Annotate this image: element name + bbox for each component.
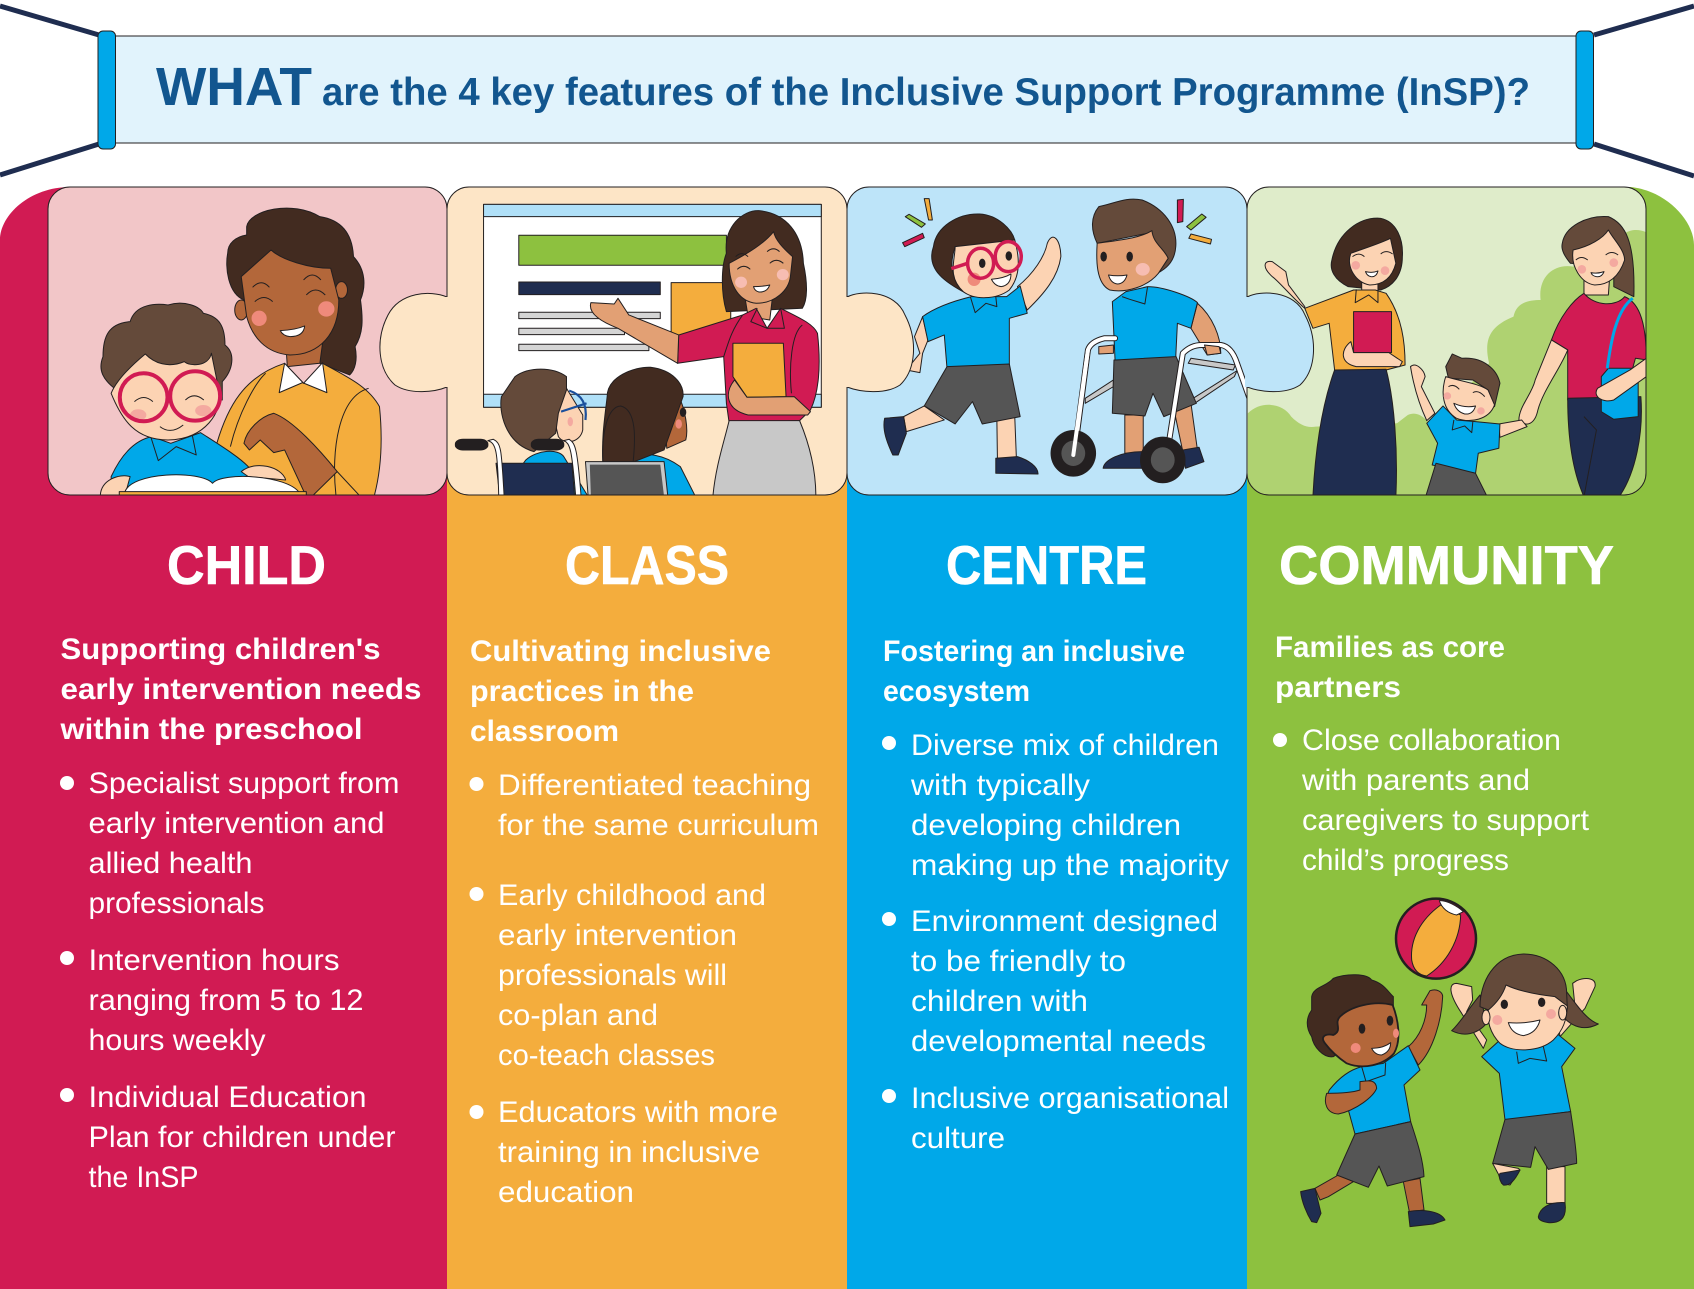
classroom screen [484, 204, 821, 407]
bullets: class: education [498, 1176, 634, 1209]
boy with glasses waving [884, 214, 1061, 474]
subheading: child [59, 633, 421, 746]
bullets: class: Early childhood and [498, 879, 766, 912]
bullets: class: co-teach classes [498, 1039, 715, 1072]
child in wheelchair [455, 369, 588, 497]
mother with bag [1519, 216, 1646, 497]
bullets: community: with parents and [1301, 764, 1530, 797]
subheading: community [1275, 631, 1505, 704]
subheading: child: early intervention needs [60, 673, 422, 706]
bullets: child: the InSP [88, 1161, 198, 1194]
column: community [1273, 534, 1614, 1227]
bullets: child: hours weekly [88, 1024, 266, 1057]
subheading: centre [883, 635, 1185, 708]
bullets: centre: developing children [911, 809, 1181, 842]
puzzle knob: centre into community [1247, 293, 1314, 392]
bullets: community: caregivers to support [1302, 804, 1590, 837]
bullets: class: co-plan and [498, 999, 658, 1032]
bullets: child: allied health [88, 847, 252, 880]
subheading: child: within the preschool [59, 713, 362, 746]
bullets: child: Intervention hours [88, 944, 340, 977]
bullets: class: professionals will [498, 959, 727, 992]
subheading: child: Supporting children's [60, 633, 380, 666]
title [156, 57, 1530, 117]
bullets: child: Specialist support from [88, 767, 400, 800]
bullets: centre: culture [911, 1122, 1005, 1155]
subheading: centre: Fostering an inclusive [883, 635, 1185, 668]
bullets: child: Plan for children under [88, 1121, 396, 1154]
panel: class illustration [380, 187, 847, 497]
subheading: class [470, 635, 771, 748]
teacher with red book [1265, 218, 1405, 497]
bullets: centre: Environment designed [911, 905, 1218, 938]
bullets: centre: to be friendly to [911, 945, 1126, 978]
puzzle knob: class into centre [844, 293, 914, 392]
bullets: class: for the same curriculum [498, 809, 819, 842]
bullets: community: child’s progress [1302, 844, 1509, 877]
column: centre [882, 534, 1229, 1155]
banner [0, 6, 1694, 176]
beach ball [1396, 899, 1476, 979]
title: are the 4 key features of the Inclusive Support Programme (InSP)? [322, 71, 1530, 114]
bullets: child: early intervention and [88, 807, 384, 840]
bullets: community: Close collaboration [1302, 724, 1561, 757]
column: class [470, 534, 819, 1209]
woman with sweater [217, 208, 381, 497]
bullets: community [1273, 724, 1590, 877]
heading: child: CHILD [167, 534, 326, 596]
column: child [59, 534, 421, 1194]
teacher pointing [590, 211, 819, 497]
girl with pigtails [1451, 954, 1598, 1223]
bullets: centre [882, 729, 1229, 1155]
subheading: community: partners [1275, 671, 1401, 704]
title: WHAT [156, 57, 312, 117]
bullets: child [60, 767, 400, 1194]
small boy holding hands [1410, 354, 1527, 498]
bullets: child: ranging from 5 to 12 [88, 984, 364, 1017]
bullets: centre: children with [911, 985, 1088, 1018]
heading: class: CLASS [565, 534, 729, 596]
bullets: child: professionals [88, 887, 264, 920]
boy with glasses and book [100, 303, 306, 497]
sparks [903, 199, 1212, 247]
heading: community: COMMUNITY [1279, 534, 1614, 596]
panel: child illustration [48, 187, 447, 497]
subheading: centre: ecosystem [883, 675, 1030, 708]
heading: centre: CENTRE [946, 534, 1147, 596]
subheading: class: practices in the [470, 675, 694, 708]
bullets: centre: with typically [910, 769, 1090, 802]
children playing with ball [1301, 899, 1598, 1227]
bullets: class: early intervention [498, 919, 737, 952]
bullets: class [470, 769, 819, 1209]
bullets: class: Educators with more [498, 1096, 778, 1129]
panel: community illustration [1245, 187, 1652, 498]
subheading: class: classroom [470, 715, 619, 748]
boy with walker [1051, 199, 1249, 483]
puzzle knob: class into child [380, 293, 450, 392]
bullets: centre: developmental needs [911, 1025, 1206, 1058]
bullets: centre: Diverse mix of children [911, 729, 1219, 762]
green bushes [1248, 230, 1652, 497]
bullets: child: Individual Education [88, 1081, 366, 1114]
subheading: class: Cultivating inclusive [470, 635, 771, 668]
bullets: class: training in inclusive [498, 1136, 760, 1169]
subheading: community: Families as core [1275, 631, 1505, 664]
boy with curly hair [1301, 975, 1445, 1227]
panel: centre illustration [844, 187, 1249, 495]
bullets: centre: making up the majority [911, 849, 1229, 882]
child in chair [585, 367, 696, 497]
bullets: class: Differentiated teaching [498, 769, 811, 802]
bullets: centre: Inclusive organisational [911, 1082, 1229, 1115]
